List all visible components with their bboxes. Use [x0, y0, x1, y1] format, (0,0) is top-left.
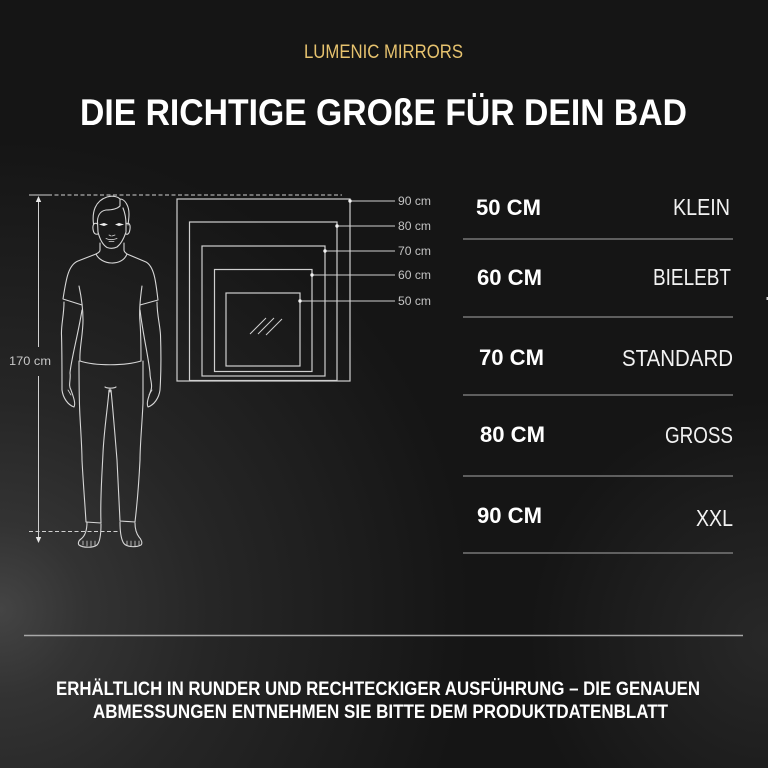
- footer divider: [24, 634, 743, 636]
- stray tick mark at right edge: [766, 297, 768, 300]
- brand name: LUMENIC MIRRORS: [304, 41, 463, 63]
- size leader lines and labels: 90 cm: [398, 196, 431, 208]
- mirror 70 cm: [202, 246, 325, 376]
- size leader lines and labels: 60 cm: [398, 270, 431, 282]
- arms and hands: [61, 302, 161, 407]
- row: 80 cm gross: 80 CM: [480, 422, 545, 447]
- row: 80 cm gross: [463, 422, 733, 476]
- t-shirt: [63, 254, 158, 365]
- glass reflection icon: [250, 318, 282, 335]
- title: DIE RICHTIGE GROßE FÜR DEIN BAD: [80, 92, 687, 133]
- size leader lines and labels: [298, 196, 431, 308]
- row: 50 cm klein: [463, 194, 733, 239]
- height dimension: 170 cm: [9, 195, 342, 543]
- footer note: ABMESSUNGEN ENTNEHMEN SIE BITTE DEM PRODUKTDATENBLATT: [93, 702, 668, 723]
- footer note: ERHÄLTLICH IN RUNDER UND RECHTECKIGER AUSFÜHRUNG – DIE GENAUEN: [56, 679, 700, 700]
- size table: [463, 194, 733, 553]
- row: 50 cm klein: 50 CM: [476, 195, 541, 220]
- footer note: [56, 679, 700, 723]
- size leader lines and labels: 70 cm: [398, 246, 431, 258]
- person outline: [61, 196, 161, 547]
- mirror 80 cm: [190, 222, 337, 380]
- row: 60 cm bielebt: BIELEBT: [653, 264, 731, 290]
- row: 80 cm gross: GROSS: [665, 422, 733, 448]
- row: 90 cm xxl: 90 CM: [477, 503, 542, 528]
- mirror 60 cm: [214, 270, 312, 372]
- mirror 90 cm: [177, 199, 350, 381]
- eyes: [99, 223, 124, 226]
- height dimension: 170 cm: 170 cm: [9, 354, 51, 368]
- nested mirror sizes diagram: [177, 199, 350, 381]
- row: 70 cm standard: [463, 345, 733, 395]
- row: 60 cm bielebt: 60 CM: [477, 265, 542, 290]
- row: 70 cm standard: 70 CM: [479, 345, 544, 370]
- mirror 50 cm: [226, 293, 300, 366]
- row: 50 cm klein: KLEIN: [673, 194, 730, 220]
- row: 60 cm bielebt: [463, 264, 733, 317]
- size leader lines and labels: 50 cm: [398, 296, 431, 308]
- row: 90 cm xxl: [463, 503, 733, 553]
- row: 90 cm xxl: XXL: [696, 505, 733, 531]
- feet: [78, 522, 142, 547]
- size leader lines and labels: 80 cm: [398, 221, 431, 233]
- trousers: [79, 361, 143, 523]
- row: 70 cm standard: STANDARD: [622, 345, 733, 371]
- head and hair: [93, 196, 130, 254]
